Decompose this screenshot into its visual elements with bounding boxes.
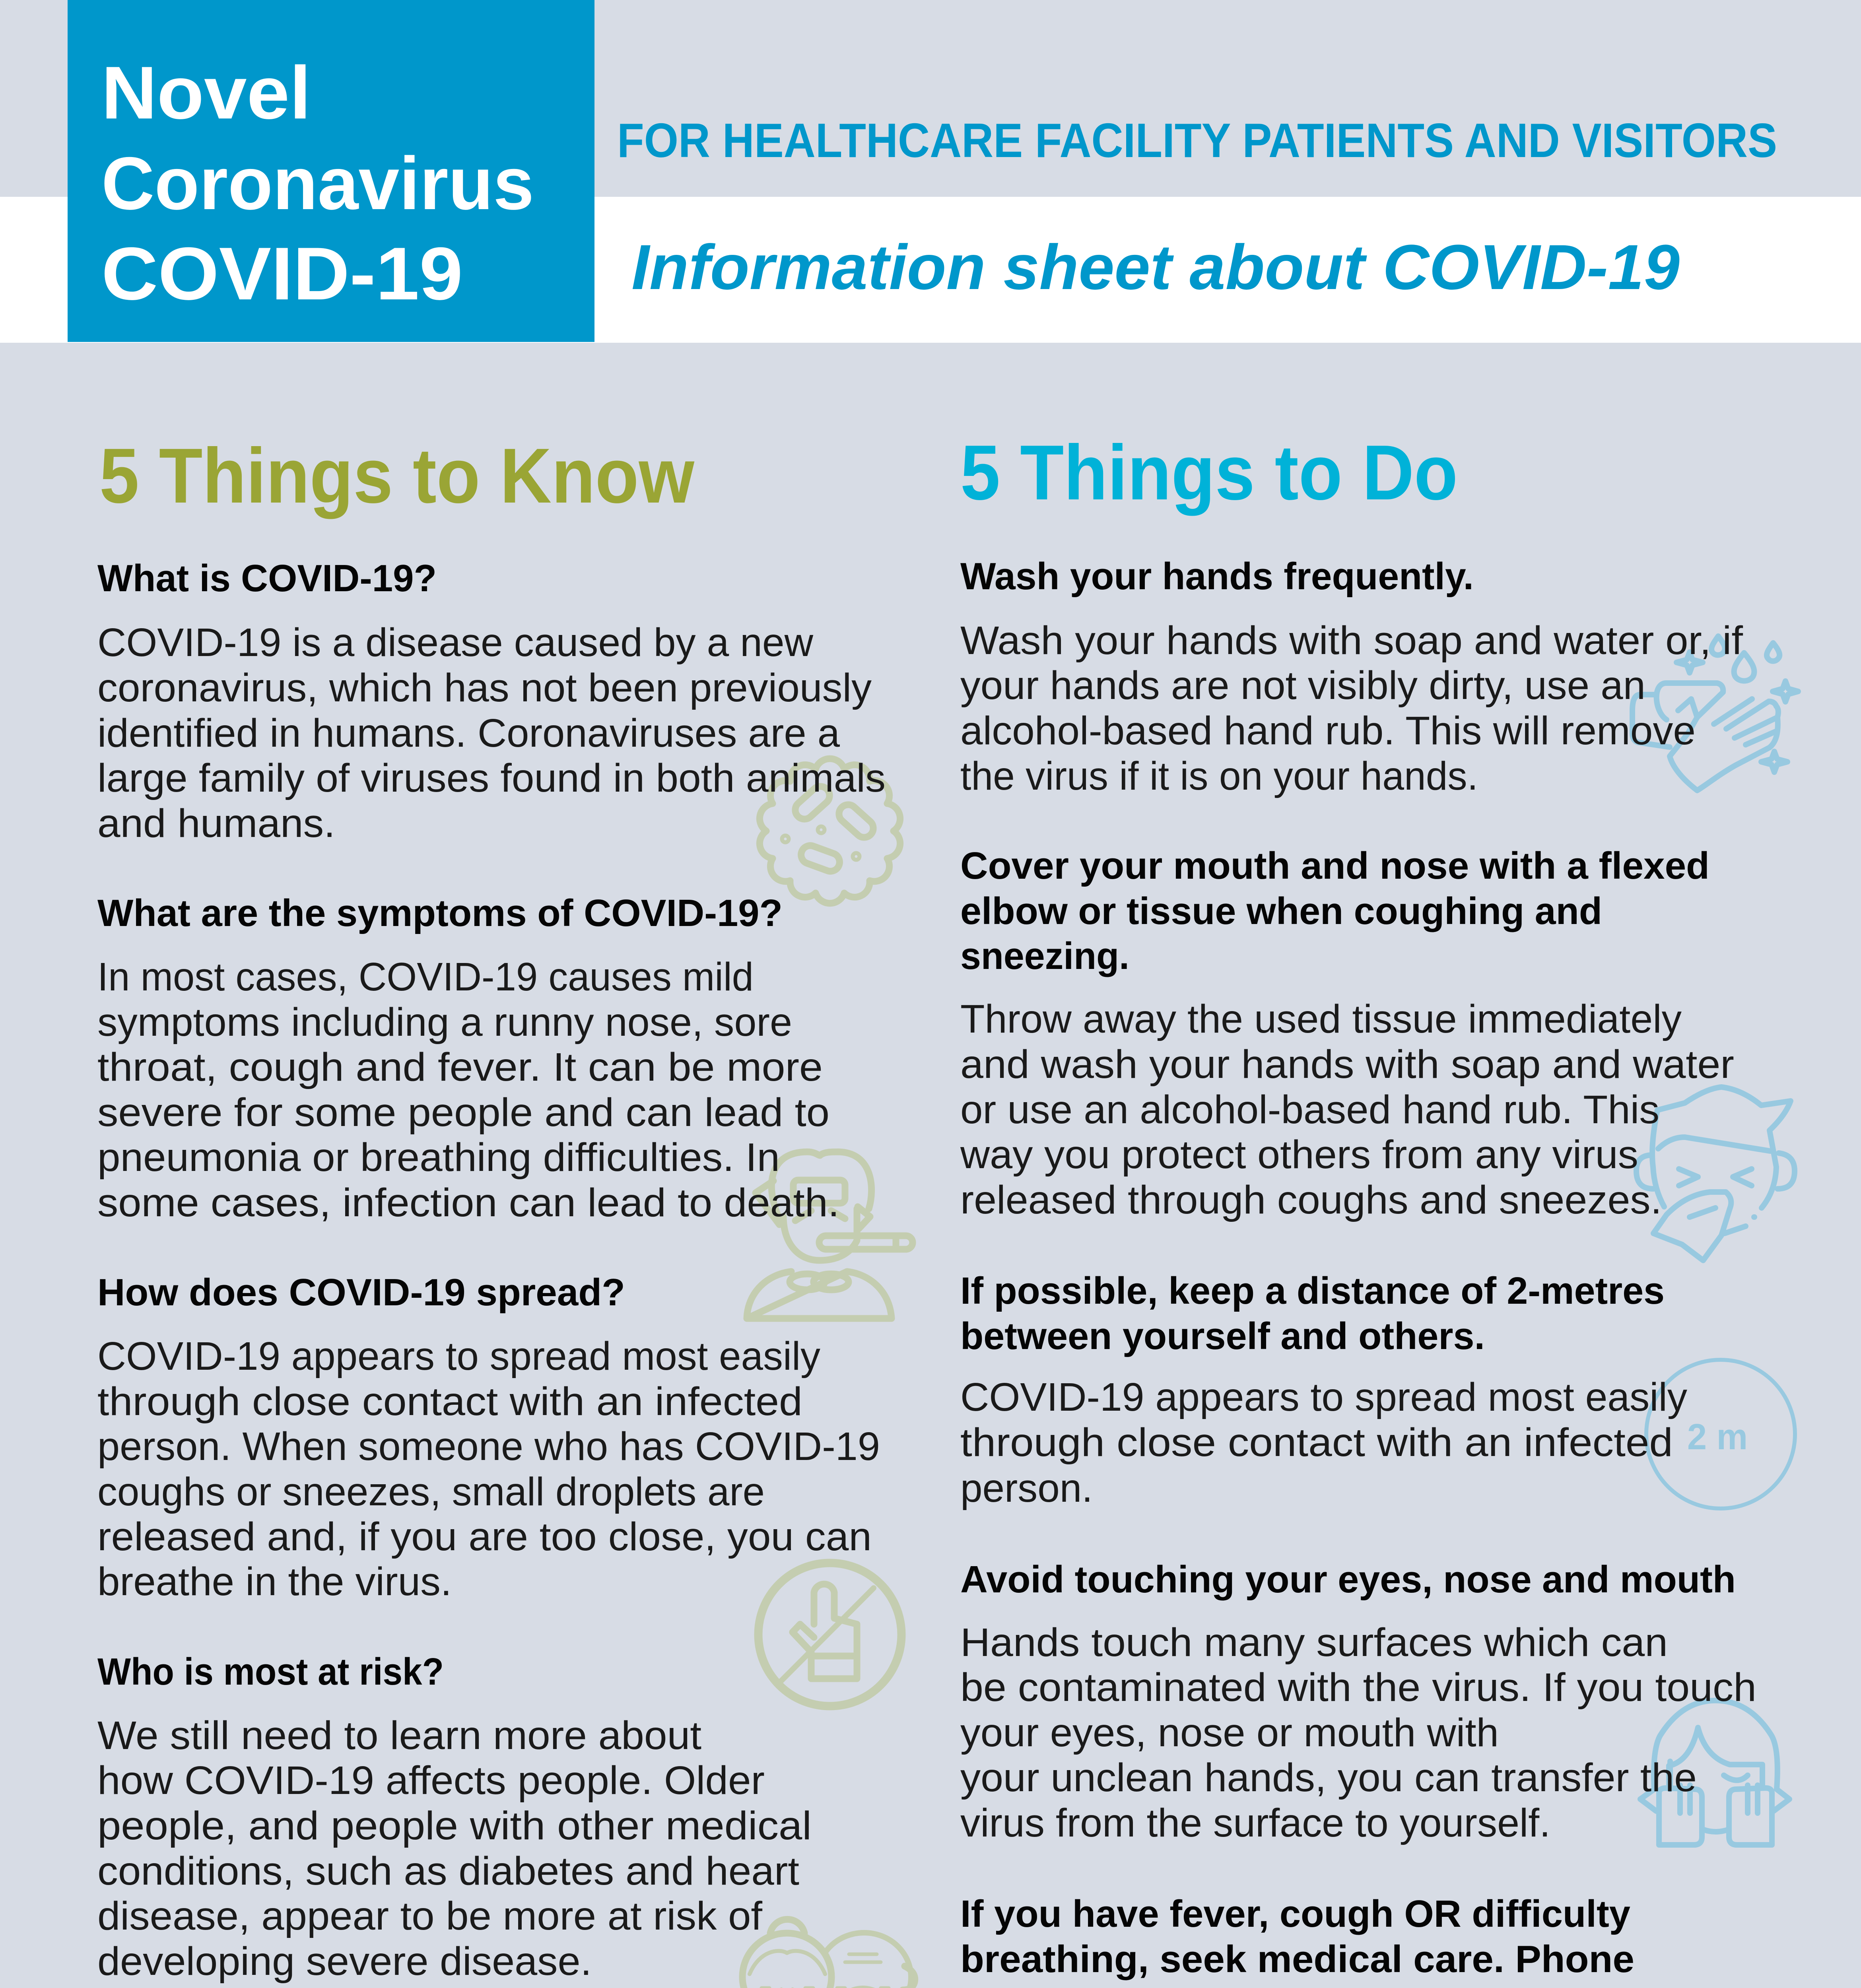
- icon: washing hands: [1632, 636, 1798, 790]
- text: wash hands: [960, 555, 1743, 798]
- text: spread: person. When someone who has COVID-19: [97, 1424, 880, 1469]
- title block: Novel: [101, 51, 311, 134]
- text: who is most at risk: Who is most at risk?: [97, 1650, 444, 1693]
- text: cover mouth and nose: released through coughs and sneezes.: [960, 1178, 1662, 1222]
- text: symptoms: symptoms including a runny nose, sore: [97, 1000, 792, 1044]
- text: cover mouth and nose: and wash your hands with soap and water: [960, 1042, 1734, 1087]
- audience line: FOR HEALTHCARE FACILITY PATIENTS AND VISITORS: [617, 113, 1777, 167]
- text: cover mouth and nose: sneezing.: [960, 935, 1129, 977]
- header band: [0, 0, 1861, 343]
- text: keep distance: COVID-19 appears to spread most easily: [960, 1375, 1687, 1419]
- text: symptoms: severe for some people and can lead to: [97, 1090, 829, 1135]
- text: symptoms: [97, 892, 839, 1225]
- text: seek medical care: If you have fever, cough OR difficulty: [960, 1893, 1630, 1935]
- text: who is most at risk: [97, 1650, 812, 1984]
- text: cover mouth and nose: [960, 845, 1734, 1222]
- text: spread: COVID-19 appears to spread most easily: [97, 1334, 820, 1378]
- text: avoid touching: Avoid touching your eyes, nose and mouth: [960, 1558, 1736, 1601]
- panel: 5 things to know: [97, 432, 915, 1988]
- text: avoid touching: Hands touch many surfaces which can: [960, 1620, 1668, 1665]
- text: seek medical care: breathing, seek medical care. Phone: [960, 1938, 1634, 1980]
- text: what is covid-19: identified in humans. Coronaviruses are a: [97, 711, 840, 755]
- text: symptoms: In most cases, COVID-19 causes mild: [97, 955, 754, 999]
- icon: person with thermometer: [747, 1152, 913, 1318]
- text: keep distance: If possible, keep a distance of 2-metres: [960, 1270, 1665, 1312]
- text: what is covid-19: [97, 557, 886, 846]
- text: what is covid-19: COVID-19 is a disease caused by a new: [97, 620, 814, 665]
- text: spread: breathe in the virus.: [97, 1559, 452, 1604]
- icon: elderly couple: [742, 1919, 915, 1988]
- text: what is covid-19: What is COVID-19?: [97, 557, 437, 600]
- text: spread: [97, 1271, 880, 1604]
- text: wash hands: Wash your hands with soap and water or, if: [960, 618, 1743, 663]
- text: who is most at risk: developing severe disease.: [97, 1939, 592, 1984]
- text: who is most at risk: We still need to learn more about: [97, 1713, 701, 1758]
- text: avoid touching: be contaminated with the virus. If you touch: [960, 1665, 1756, 1710]
- text: what is covid-19: coronavirus, which has not been previously: [97, 666, 872, 710]
- title block: Coronavirus: [101, 142, 534, 225]
- text: avoid touching: your unclean hands, you can transfer the: [960, 1755, 1697, 1800]
- text: cover mouth and nose: elbow or tissue when coughing and: [960, 890, 1602, 932]
- text: avoid touching: virus from the surface to yourself.: [960, 1801, 1550, 1845]
- text: wash hands: the virus if it is on your hands.: [960, 754, 1478, 798]
- icon: hands over face: [1640, 1701, 1789, 1845]
- text: symptoms: pneumonia or breathing difficulties. In: [97, 1135, 780, 1180]
- text: symptoms: throat, cough and fever. It can be more: [97, 1045, 823, 1089]
- text: who is most at risk: people, and people with other medical: [97, 1804, 812, 1848]
- text: cover mouth and nose: Cover your mouth and nose with a flexed: [960, 845, 1709, 887]
- text: seek medical care: [960, 1893, 1723, 1988]
- text: what is covid-19: large family of viruses found in both animals: [97, 756, 886, 800]
- subtitle: Information sheet about COVID-19: [631, 231, 1680, 303]
- text: who is most at risk: disease, appear to be more at risk of: [97, 1894, 762, 1938]
- text: wash hands: alcohol-based hand rub. This will remove: [960, 709, 1696, 753]
- text: wash hands: Wash your hands frequently.: [960, 555, 1474, 598]
- text: keep distance: between yourself and others.: [960, 1315, 1485, 1357]
- text: keep distance: person.: [960, 1466, 1093, 1510]
- text: cover mouth and nose: Throw away the used tissue immediately: [960, 997, 1682, 1041]
- icon: 2m distance: [1646, 1360, 1795, 1508]
- text: cover mouth and nose: or use an alcohol-based hand rub. This: [960, 1087, 1659, 1132]
- text: cover mouth and nose: way you protect others from any virus: [960, 1132, 1638, 1177]
- text: keep distance: [960, 1270, 1687, 1510]
- panel: 5 things to do: [960, 429, 1798, 1988]
- icon: sneezing person: [1636, 1087, 1795, 1260]
- text: avoid touching: your eyes, nose or mouth with: [960, 1710, 1499, 1755]
- icon: 2m distance: 2 m: [1687, 1417, 1748, 1457]
- title block: [68, 0, 594, 342]
- text: who is most at risk: conditions, such as diabetes and heart: [97, 1849, 799, 1893]
- heading: 5 things to do: 5 Things to Do: [960, 429, 1458, 516]
- text: spread: through close contact with an infected: [97, 1379, 802, 1424]
- title block: COVID-19: [101, 232, 463, 315]
- text: who is most at risk: how COVID-19 affects people. Older: [97, 1758, 765, 1803]
- text: spread: How does COVID-19 spread?: [97, 1271, 625, 1314]
- text: what is covid-19: and humans.: [97, 801, 335, 846]
- icon: no touching: [758, 1563, 901, 1706]
- icon: virus: [760, 759, 900, 903]
- text: keep distance: through close contact with an infected: [960, 1420, 1673, 1465]
- heading: 5 things to know: 5 Things to Know: [99, 432, 694, 519]
- text: spread: coughs or sneezes, small droplets are: [97, 1470, 765, 1514]
- text: symptoms: some cases, infection can lead to death.: [97, 1180, 839, 1225]
- text: avoid touching: [960, 1558, 1756, 1845]
- text: symptoms: What are the symptoms of COVID-19?: [97, 892, 783, 934]
- text: spread: released and, if you are too close, you can: [97, 1514, 872, 1559]
- text: wash hands: your hands are not visibly dirty, use an: [960, 663, 1645, 708]
